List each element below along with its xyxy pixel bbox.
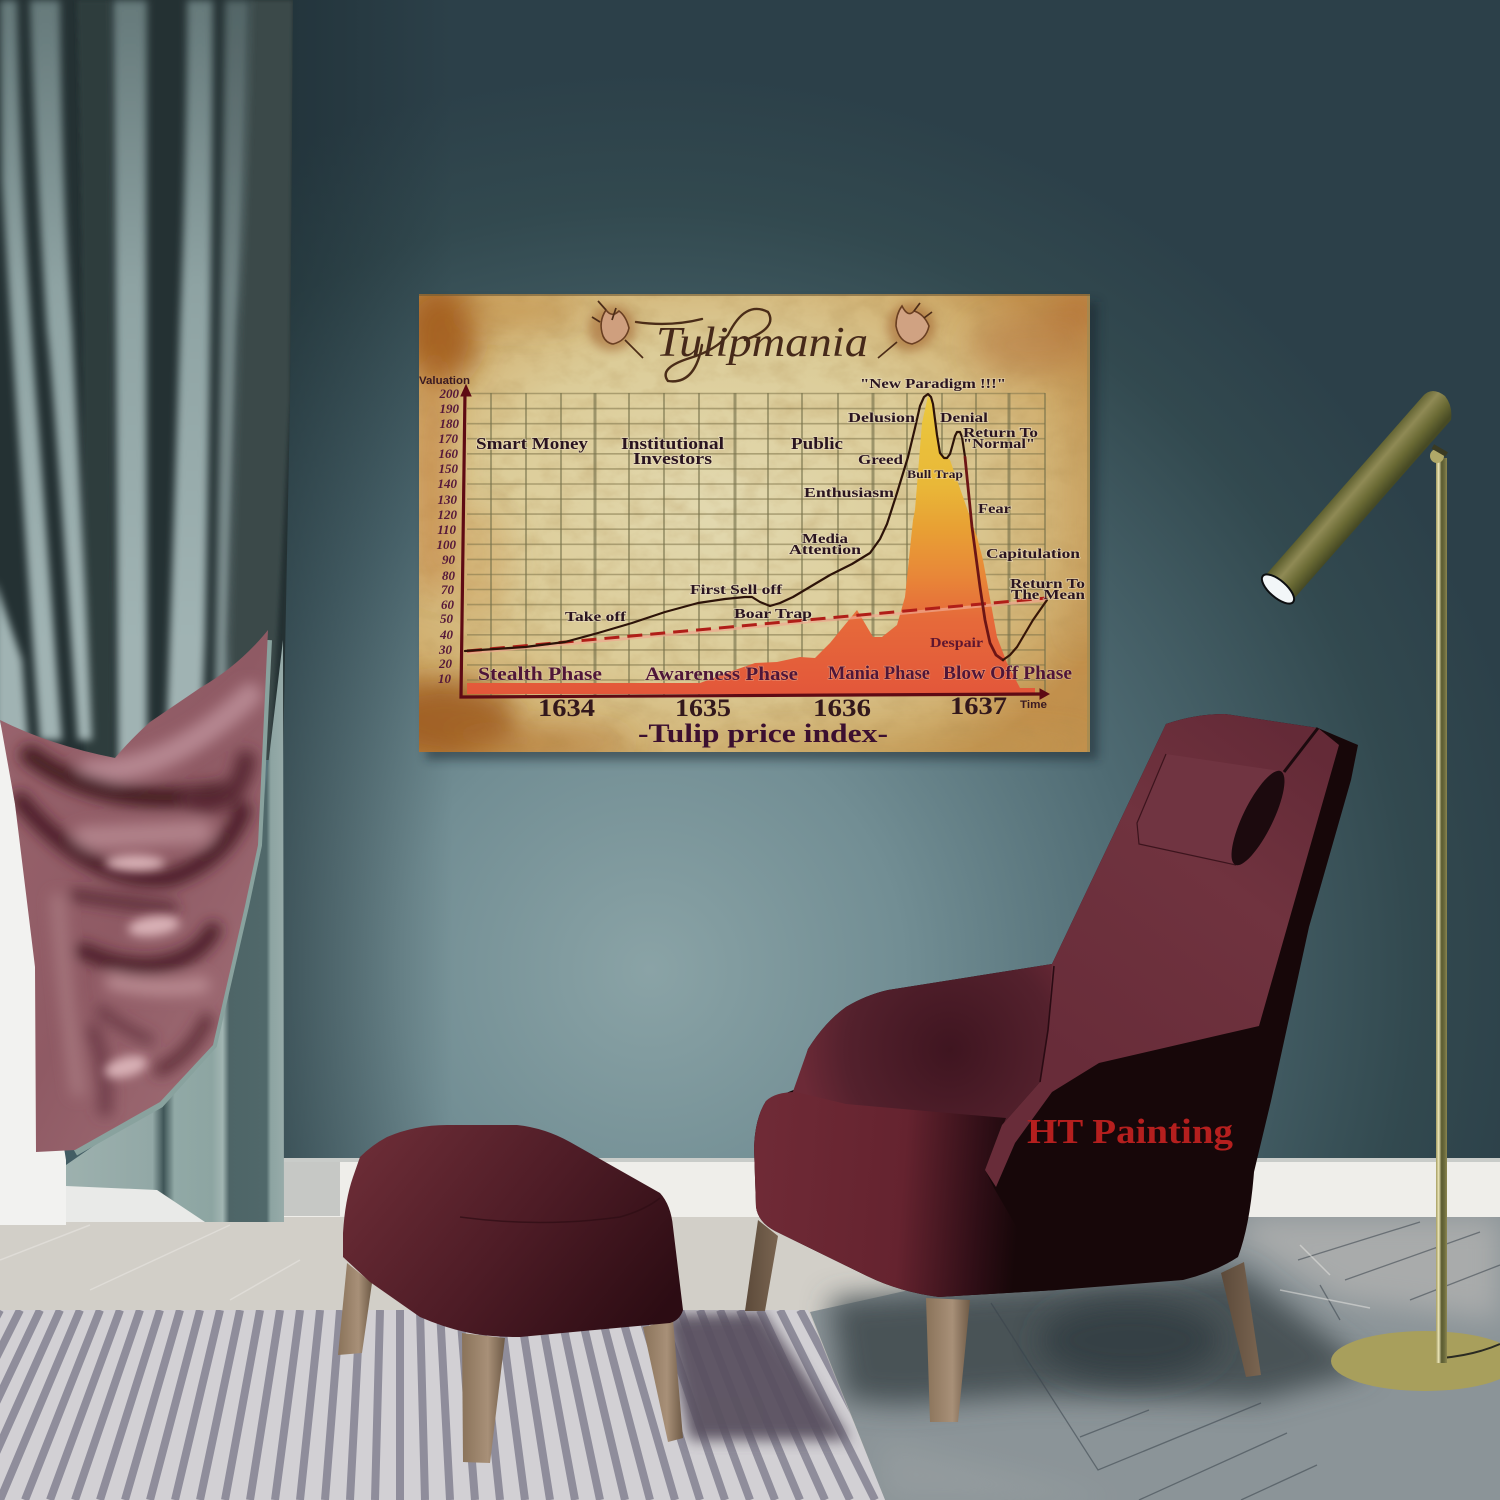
investor group labels — [476, 434, 843, 468]
sentiment labels: Delusion — [848, 410, 916, 425]
y axis scale: 150 — [438, 461, 458, 476]
title: Tulipmania: Tulipmania — [656, 320, 868, 366]
y axis scale: 40 — [439, 627, 454, 642]
year labels: 1637 — [950, 693, 1007, 720]
curtain tie-back lining — [75, 640, 268, 1152]
phase labels: Awareness Phase — [645, 664, 798, 685]
phase labels — [478, 663, 1072, 685]
y axis scale: 200 — [438, 386, 460, 401]
year labels — [538, 693, 1007, 722]
y axis scale: 160 — [438, 446, 458, 461]
floor plank joints — [991, 1222, 1500, 1500]
y axis scale: 190 — [440, 401, 460, 416]
y axis scale: 10 — [438, 671, 452, 686]
y axis scale: 110 — [437, 522, 456, 537]
time axis title: Time — [1020, 699, 1047, 711]
sentiment labels: Despair — [930, 635, 983, 650]
lamp pole — [1436, 458, 1447, 1363]
lamp base — [1331, 1331, 1500, 1391]
y axis scale: 80 — [442, 568, 456, 583]
y axis scale: 90 — [442, 552, 456, 567]
sentiment labels — [565, 376, 1086, 650]
y axis scale: 30 — [438, 642, 452, 657]
lamp joint — [1430, 444, 1448, 463]
pink drape — [0, 630, 268, 1152]
baseboard — [280, 1158, 1500, 1218]
sentiment labels: First Sell off — [690, 582, 783, 597]
curtain — [0, 0, 295, 1225]
phase labels: Mania Phase — [828, 663, 930, 684]
phase labels: Stealth Phase — [478, 664, 602, 685]
chair seat — [754, 1092, 1057, 1297]
sentiment labels: Enthusiasm — [804, 485, 895, 500]
sentiment labels: Return To — [963, 425, 1038, 440]
upper curtain folds — [0, 0, 295, 770]
axes — [461, 385, 1049, 699]
sentiment labels: Denial — [940, 410, 988, 425]
phase labels: Blow Off Phase — [943, 663, 1072, 684]
sentiment labels: Media — [802, 531, 848, 546]
year labels: 1634 — [538, 695, 596, 722]
y axis scale: 180 — [440, 416, 460, 431]
chair back panel — [985, 714, 1339, 1187]
floor lamp — [1257, 391, 1500, 1391]
floor — [0, 1217, 1500, 1500]
y axis scale — [436, 386, 460, 686]
investor group labels: Investors — [633, 449, 713, 468]
title: Tulipmania — [636, 309, 868, 381]
sentiment labels: Boar Trap — [734, 606, 812, 621]
caption: tulip price index: -Tulip price index- — [638, 719, 888, 748]
icon: right tulip — [878, 303, 935, 358]
year labels: 1636 — [813, 695, 871, 722]
sentiment labels: Fear — [978, 501, 1011, 516]
price line — [465, 394, 1047, 660]
sentiment labels: "Normal" — [963, 436, 1035, 451]
y axis scale: 70 — [441, 582, 454, 597]
ottoman — [338, 1125, 683, 1463]
y axis scale: 20 — [438, 656, 452, 671]
headrest pillow — [1137, 728, 1318, 871]
sentiment labels: Return To — [1010, 576, 1085, 591]
ottoman legs — [338, 1263, 683, 1463]
chart: tulip price index — [419, 375, 1086, 722]
sentiment labels: "New Paradigm !!!" — [860, 376, 1006, 391]
y axis scale: 170 — [438, 431, 458, 446]
y axis scale: 60 — [441, 597, 454, 612]
y axis scale: 50 — [440, 611, 454, 626]
armchair — [745, 714, 1358, 1422]
y axis title: Valuation — [419, 375, 470, 387]
investor group labels: Institutional — [621, 434, 724, 453]
y axis scale: 140 — [438, 476, 458, 491]
poster: Tulipmania chart on parchment — [375, 285, 1110, 760]
sentiment labels: Take off — [565, 609, 627, 624]
y axis scale: 120 — [438, 507, 458, 522]
chart grid — [467, 393, 1045, 696]
sentiment labels: Attention — [789, 542, 862, 557]
sheer white curtain — [0, 722, 205, 1225]
y axis scale: 130 — [438, 492, 458, 507]
watermark: HT Painting — [1027, 1112, 1234, 1151]
rug — [0, 1310, 900, 1500]
ottoman cushion — [343, 1125, 683, 1337]
year labels: 1635 — [675, 695, 731, 722]
chair silhouette — [754, 714, 1358, 1297]
price area fill — [467, 396, 1035, 694]
icon: left tulip — [588, 301, 643, 358]
chair legs — [745, 1220, 1261, 1422]
mean dashed trend line — [467, 598, 1047, 653]
investor group labels: Smart Money — [476, 434, 589, 453]
investor group labels: Public — [791, 434, 843, 453]
lamp head — [1257, 391, 1451, 609]
y axis scale: 100 — [436, 537, 456, 552]
chair arm interior — [790, 964, 1058, 1125]
sentiment labels: The Mean — [1011, 587, 1086, 602]
sentiment labels: Bull Trap — [907, 467, 963, 481]
sentiment labels: Greed — [858, 452, 904, 467]
sentiment labels: Capitulation — [986, 546, 1081, 561]
